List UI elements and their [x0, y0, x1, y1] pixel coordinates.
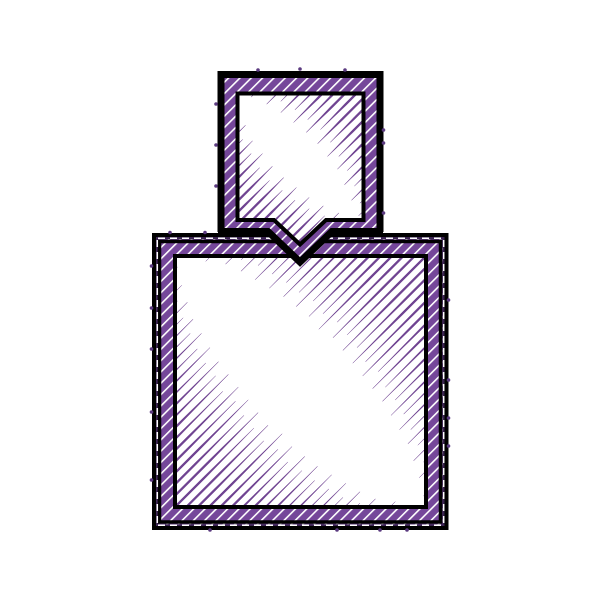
white dashed edges [157, 238, 444, 525]
dark gap between outlines [157, 238, 444, 526]
cap bottom outline with pointed notch [218, 232, 383, 262]
body outer outline [154, 235, 446, 528]
body edge dots [150, 231, 450, 532]
cap purple hatched band [220, 73, 380, 263]
body inner tapered hatching [177, 258, 424, 505]
bottle body [150, 230, 450, 532]
cap inner tapered hatching [240, 96, 362, 242]
body second outline [160, 242, 440, 522]
body inner outline [175, 256, 426, 507]
bottle cap [214, 67, 386, 267]
perfume bottle illustration [150, 67, 450, 532]
cap inner panel [236, 94, 365, 245]
cap edge dots [214, 67, 385, 215]
body purple hatched band [155, 236, 446, 527]
cap inner outline [238, 94, 364, 244]
cap outer outline [221, 74, 380, 232]
body inner panel [175, 256, 426, 507]
